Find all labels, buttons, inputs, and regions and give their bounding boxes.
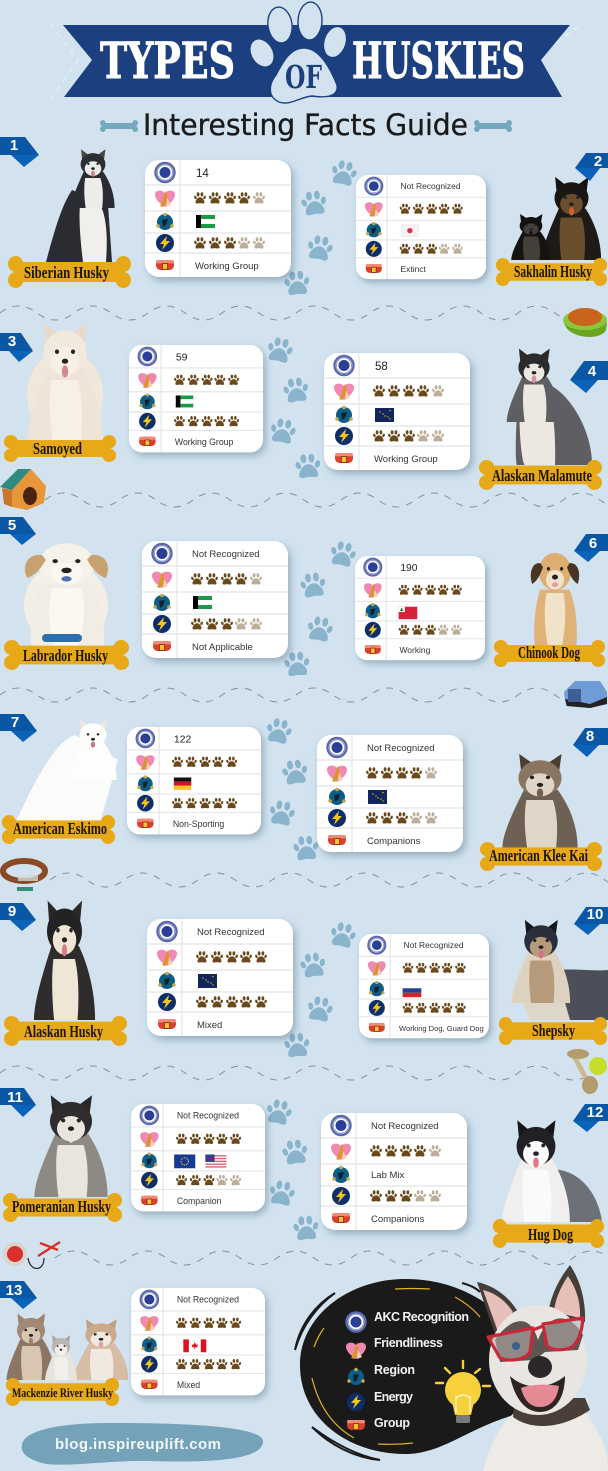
name: Sakhalin Husky xyxy=(496,258,607,286)
dog 5: Labrador Husky xyxy=(24,543,108,647)
card 8: American Klee Kai xyxy=(317,735,463,852)
legend: Group: Group xyxy=(374,1416,410,1430)
card 6: Chinook Dog xyxy=(355,556,485,660)
card 2: Sakhalin Husky: Extinct xyxy=(400,264,426,274)
card 3: Samoyed: Working Group xyxy=(175,437,234,447)
website pill xyxy=(22,1423,263,1465)
icon: retractable leash xyxy=(3,1242,60,1268)
number badge 3 xyxy=(0,333,33,362)
name: American Eskimo xyxy=(2,815,115,844)
number badge 2 xyxy=(575,153,608,181)
card 7: American Eskimo xyxy=(127,727,261,834)
card 4: Alaskan Malamute: Working Group xyxy=(374,454,438,465)
card 10: Shepsky: Not Recognized xyxy=(403,940,464,950)
dog 7: American Eskimo xyxy=(16,719,118,822)
number badge 12 xyxy=(573,1104,608,1132)
number badge 9 xyxy=(0,903,36,931)
name: American Eskimo: American Eskimo xyxy=(13,819,107,838)
icon: dog collar xyxy=(3,861,45,891)
red glasses xyxy=(488,1318,583,1360)
legend: Region xyxy=(347,1363,415,1385)
title words: TYPES xyxy=(100,31,235,90)
dog 4: Alaskan Malamute xyxy=(507,349,592,465)
dog 12: Hug Dog xyxy=(502,1120,602,1222)
card 13: Mackenzie River Husky xyxy=(131,1288,265,1395)
number badge 10: 10 xyxy=(587,906,603,923)
card 6: Chinook Dog: 190 xyxy=(400,563,418,574)
legend: AKC Recognition xyxy=(346,1310,469,1332)
number badge 9: 9 xyxy=(8,903,16,920)
icon: rope toy and ball xyxy=(567,1049,607,1094)
legend: Friendliness: Friendliness xyxy=(374,1336,443,1350)
card 5: Labrador Husky: Not Applicable xyxy=(192,642,253,653)
card 10: Shepsky xyxy=(359,934,489,1038)
card 12: Hug Dog: Lab Mix xyxy=(371,1170,405,1181)
icon: dog house xyxy=(0,469,46,510)
name: Shepsky: Shepsky xyxy=(532,1021,575,1040)
number badge 12: 12 xyxy=(587,1104,603,1121)
name: Hug Dog: Hug Dog xyxy=(528,1225,573,1244)
name: Samoyed: Samoyed xyxy=(33,439,82,458)
name: Alaskan Husky: Alaskan Husky xyxy=(24,1022,103,1041)
legend panel xyxy=(295,1279,525,1460)
number badge 4 xyxy=(570,361,608,393)
name: Alaskan Malamute xyxy=(479,460,602,490)
big husky illustration xyxy=(477,1265,608,1471)
name: Mackenzie River Husky: Mackenzie River Husky xyxy=(12,1385,113,1400)
number badge 11 xyxy=(0,1088,36,1117)
name: Shepsky xyxy=(499,1017,607,1045)
dog 11: Pomeranian Husky xyxy=(34,1095,108,1197)
name: Chinook Dog xyxy=(494,640,605,667)
name: Mackenzie River Husky xyxy=(6,1378,119,1406)
legend: Friendliness xyxy=(346,1336,443,1359)
number badge 4: 4 xyxy=(588,363,597,380)
card 3: Samoyed: 59 xyxy=(176,352,188,364)
number badge 13: 13 xyxy=(6,1282,22,1299)
decorative paw trails xyxy=(264,159,360,1241)
card 6: Chinook Dog: Working xyxy=(399,645,431,655)
card 7: American Eskimo: 122 xyxy=(174,734,192,746)
name: Hug Dog xyxy=(493,1219,604,1248)
number badge 8: 8 xyxy=(586,728,594,745)
legend: AKC Recognition: AKC Recognition xyxy=(374,1310,469,1324)
number badge 8 xyxy=(573,728,608,757)
card 1: Siberian Husky xyxy=(145,160,291,277)
card 8: American Klee Kai: Companions xyxy=(367,836,421,847)
legend: Energy: Energy xyxy=(374,1390,413,1404)
card 12: Hug Dog xyxy=(321,1113,467,1230)
icon: pet carrier xyxy=(564,681,607,708)
name: Samoyed xyxy=(4,435,116,462)
name: Labrador Husky xyxy=(4,640,129,670)
number badge 7 xyxy=(0,714,37,742)
icon: light bulb xyxy=(436,1361,490,1423)
big paw xyxy=(245,1,350,103)
number badge 6 xyxy=(574,534,608,562)
number badge 5 xyxy=(0,517,36,545)
dog 6: Chinook Dog xyxy=(531,553,579,645)
name: Siberian Husky xyxy=(8,256,131,288)
card 1: Siberian Husky: Working Group xyxy=(195,261,259,272)
number badge 7: 7 xyxy=(11,714,19,731)
dog 3: Samoyed xyxy=(27,323,103,440)
number badge 2: 2 xyxy=(594,153,602,170)
card 4: Alaskan Malamute xyxy=(324,353,470,470)
dog 8: American Klee Kai xyxy=(502,754,578,848)
dog 10: Shepsky xyxy=(512,920,608,1020)
card 1: Siberian Husky: 14 xyxy=(196,168,209,180)
card 11: Pomeranian Husky: Not Recognized xyxy=(177,1111,239,1121)
card 12: Hug Dog: Not Recognized xyxy=(371,1121,439,1132)
black speech blob xyxy=(300,1279,525,1454)
legend: Energy xyxy=(347,1390,413,1411)
number badge 5: 5 xyxy=(8,517,16,534)
card 9: Alaskan Husky: Not Recognized xyxy=(197,927,265,938)
legend: Group xyxy=(347,1416,410,1430)
card 11: Pomeranian Husky xyxy=(131,1104,265,1211)
card 8: American Klee Kai: Not Recognized xyxy=(367,743,435,754)
card 9: Alaskan Husky xyxy=(147,919,293,1036)
card 5: Labrador Husky xyxy=(142,541,288,658)
card 10: Shepsky: Working Dog, Guard Dog xyxy=(399,1024,484,1033)
card 2: Sakhalin Husky xyxy=(356,175,486,279)
subtitle: Interesting Facts Guide xyxy=(143,108,468,142)
website pill: blog.inspireuplift.com xyxy=(55,1436,221,1453)
number badge 3: 3 xyxy=(8,333,16,350)
dog 1: Siberian Husky xyxy=(46,149,115,262)
name: Siberian Husky: Siberian Husky xyxy=(24,263,109,282)
name: Pomeranian Husky xyxy=(3,1193,122,1222)
number badge 1 xyxy=(0,137,39,167)
wavy dividers xyxy=(0,306,608,1265)
legend: Region: Region xyxy=(374,1363,415,1377)
card 4: Alaskan Malamute: 58 xyxy=(375,361,388,373)
number badge 10 xyxy=(574,906,608,935)
card 12: Hug Dog: Companions xyxy=(371,1214,425,1225)
card 3: Samoyed xyxy=(129,345,263,452)
dog 2: Sakhalin Husky xyxy=(511,177,601,260)
title banner: OF xyxy=(285,58,322,96)
name: Labrador Husky: Labrador Husky xyxy=(23,646,108,665)
number badge 1: 1 xyxy=(10,137,18,154)
card 2: Sakhalin Husky: Not Recognized xyxy=(400,181,461,191)
card 9: Alaskan Husky: Mixed xyxy=(197,1020,222,1031)
dog 13: Mackenzie River Husky xyxy=(7,1313,128,1380)
card 5: Labrador Husky: Not Recognized xyxy=(192,549,260,560)
name: American Klee Kai xyxy=(480,842,602,871)
card 13: Mackenzie River Husky: Mixed xyxy=(177,1380,200,1390)
ribbon xyxy=(63,25,570,97)
name: Pomeranian Husky: Pomeranian Husky xyxy=(12,1197,111,1216)
number badge 13 xyxy=(0,1281,37,1309)
icon: food bowl xyxy=(563,308,607,337)
card 11: Pomeranian Husky: Companion xyxy=(177,1196,222,1206)
card 13: Mackenzie River Husky: Not Recognized xyxy=(177,1295,239,1305)
dog 9: Alaskan Husky xyxy=(34,901,95,1020)
title banner xyxy=(50,1,585,103)
name: Alaskan Husky xyxy=(4,1016,127,1046)
number badge 11: 11 xyxy=(7,1089,23,1106)
card 7: American Eskimo: Non-Sporting xyxy=(173,819,224,829)
number badge 6: 6 xyxy=(589,535,597,552)
